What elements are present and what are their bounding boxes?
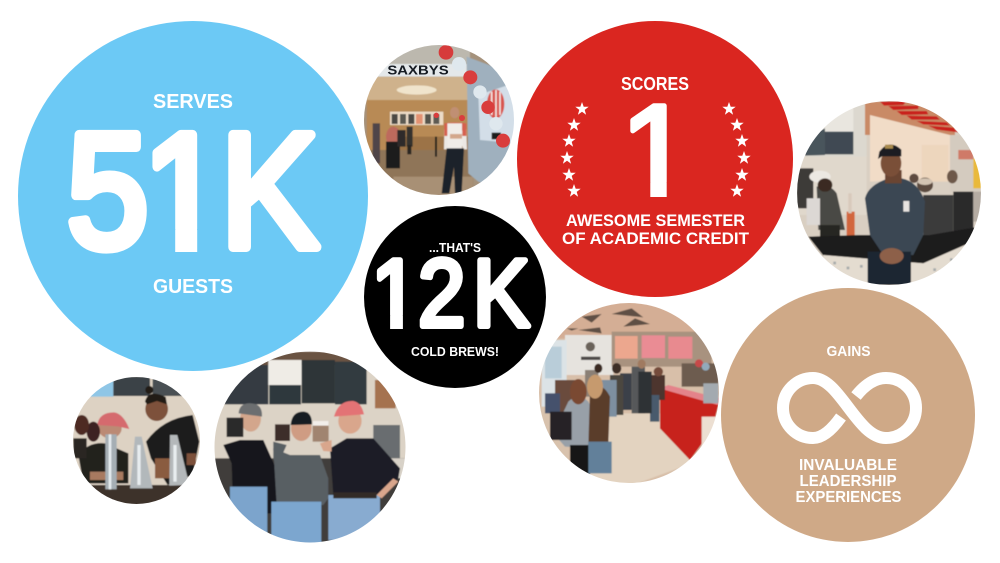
- label: that's: ...THAT'S: [429, 241, 481, 255]
- caption: awesome semester of academic credit: AWESOME SEMESTER: [566, 211, 745, 230]
- stars left: [560, 102, 589, 197]
- panel: gains invaluable leadership experiences: [721, 288, 975, 542]
- heading: scores: SCORES: [621, 74, 689, 94]
- caption: invaluable leadership experiences: LEADERSHIP: [800, 473, 896, 490]
- caption: invaluable leadership experiences: [796, 457, 902, 506]
- stars right: [722, 102, 751, 197]
- caption: awesome semester of academic credit: [562, 211, 750, 248]
- big number: 51K: 51K: [67, 100, 319, 282]
- caption: awesome semester of academic credit: OF ACADEMIC CREDIT: [562, 229, 750, 248]
- icon: infinity loop: [783, 378, 916, 438]
- photo: baristas at tap machines: [70, 375, 203, 508]
- photo: employee in cap at counter: [797, 101, 981, 285]
- panel: serves 51K guests: [18, 21, 368, 371]
- heading: gains: GAINS: [826, 343, 870, 360]
- photo: three employees holding cold brews: [213, 352, 407, 545]
- label: cold brews: COLD BREWS!: [411, 345, 499, 359]
- photo: storefront with balloons: [364, 45, 514, 195]
- caption: invaluable leadership experiences: INVALUABLE: [799, 457, 897, 474]
- photo: crowded cafe line: [539, 303, 719, 483]
- caption: invaluable leadership experiences: EXPERIENCES: [796, 489, 902, 506]
- heading: serves: SERVES: [153, 90, 233, 113]
- big number: 1: 1: [620, 78, 692, 222]
- balloons and sign: SAXBYS: [387, 63, 449, 78]
- big number: 12K: 12K: [371, 240, 530, 347]
- label: guests: GUESTS: [153, 275, 233, 298]
- panel: scores 1 semester: [517, 21, 793, 297]
- balloons and sign: [387, 45, 510, 148]
- panel: that's 12K cold brews: [364, 206, 546, 388]
